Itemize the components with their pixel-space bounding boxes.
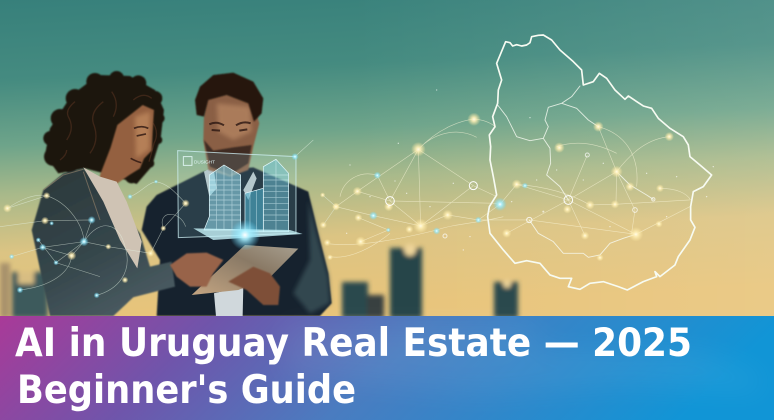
hologram base [193, 228, 303, 240]
man shirt collar [204, 167, 257, 200]
sky background [0, 0, 774, 320]
man suit [142, 167, 332, 316]
blurred city skyline [0, 244, 518, 318]
title line 2: Beginner's Guide [17, 368, 356, 413]
hologram frame [178, 151, 296, 238]
nodes over the figures [3, 153, 339, 298]
man shirt lower [214, 287, 243, 316]
man sleeve highlight [293, 200, 330, 313]
holographic panel: DUSIGHT [194, 160, 215, 165]
network lines across the map [330, 119, 691, 257]
holographic panel [178, 151, 303, 250]
man eyes and nose [209, 122, 251, 131]
tablet [192, 245, 298, 295]
woman hair curls [60, 92, 156, 162]
woman hair back [43, 71, 165, 184]
man figure [142, 73, 332, 316]
ringed nodes [386, 153, 655, 238]
hands on tablet [170, 253, 280, 305]
network nodes across the map [332, 89, 714, 261]
glowing blue nodes [369, 172, 528, 235]
glowing warm nodes [332, 113, 674, 261]
woman figure [32, 71, 175, 316]
banner gradient [0, 316, 774, 420]
small specks [346, 89, 714, 251]
network over the figures [0, 140, 336, 295]
country border [488, 35, 712, 290]
hologram label [183, 157, 192, 165]
man beard [204, 140, 252, 175]
woman eye and lips [131, 127, 148, 163]
woman face highlight [135, 112, 150, 158]
man neck and face [203, 93, 259, 177]
hologram light beam [230, 220, 260, 250]
woman face and neck [100, 105, 154, 192]
banner faint skyline texture [285, 325, 760, 395]
man hair [195, 73, 263, 122]
man face highlight [217, 103, 252, 140]
woman blazer lapel edge [43, 169, 100, 220]
title banner [0, 316, 774, 420]
woman shirt [83, 167, 142, 268]
woman blazer [32, 168, 175, 316]
title line 1: AI in Uruguay Real Estate — 2025 [15, 321, 692, 366]
hologram buildings [204, 159, 289, 232]
Uruguay map outline [488, 35, 712, 290]
internal regional borders [498, 86, 653, 257]
man and woman with tablet [0, 71, 339, 316]
